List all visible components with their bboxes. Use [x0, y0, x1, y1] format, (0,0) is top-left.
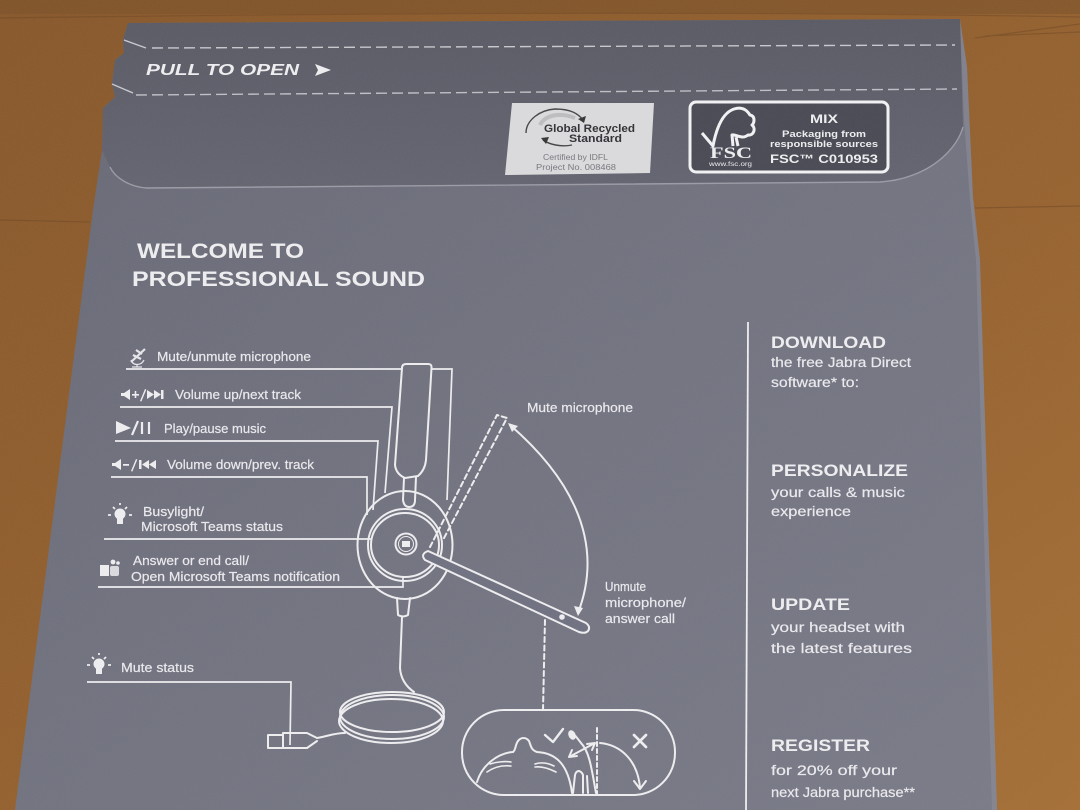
control label: volume up	[120, 387, 392, 493]
control label: play pause	[115, 421, 378, 510]
badge: FSC mix: MIX	[810, 112, 838, 126]
control label: busylight: Busylight/	[143, 504, 204, 519]
control label: answer or end call: Open Microsoft Teams notification	[131, 569, 340, 584]
top flap	[102, 19, 963, 188]
icon: Microsoft Teams	[100, 560, 120, 576]
pull to open tab	[146, 62, 331, 79]
badge: FSC mix: www.fsc.org	[708, 161, 752, 168]
column: personalize: experience	[771, 504, 851, 519]
perforation tear lines	[112, 40, 957, 95]
control label: volume down: Volume down/prev. track	[167, 457, 315, 472]
label: unmute microphone position	[605, 579, 686, 626]
badge: Global Recycled Standard: Certified by IDFL	[543, 152, 608, 162]
badge: FSC mix: responsible sources	[770, 139, 878, 150]
dashed raised microphone boom	[430, 415, 507, 547]
control label: volume down	[111, 457, 367, 515]
ear cup	[358, 491, 452, 599]
column: register: REGISTER	[771, 737, 870, 755]
pull to open tab: PULL TO OPEN	[146, 62, 300, 79]
cross mark	[634, 735, 646, 747]
control label: volume up: Volume up/next track	[175, 387, 302, 402]
column: update	[771, 596, 912, 656]
column: download	[771, 334, 911, 390]
icon: volume up and next track	[121, 389, 164, 402]
USB plug	[268, 733, 345, 748]
control label: mute microphone: Mute/unmute microphone	[157, 349, 311, 364]
column: personalize: your calls & music	[771, 485, 905, 500]
headband	[395, 364, 432, 478]
dashed connector to fit detail	[543, 620, 545, 710]
icon: light bulb	[108, 503, 132, 524]
head from above	[477, 738, 572, 793]
microphone	[571, 733, 596, 793]
badge: FSC mix: Packaging from	[782, 129, 866, 140]
column: update: your headset with	[771, 620, 905, 635]
cable coil	[339, 692, 444, 743]
label: mute microphone position: Mute microphone	[527, 400, 633, 415]
column: personalize	[771, 462, 908, 519]
control label: mute microphone	[126, 349, 452, 500]
icon: volume down and previous track	[112, 459, 156, 472]
column: register: for 20% off your	[771, 763, 898, 778]
column: update: UPDATE	[771, 596, 850, 614]
title: WELCOME TO	[137, 240, 304, 263]
column: download: software* to:	[771, 375, 859, 390]
headband neck	[403, 477, 416, 507]
icon: muted microphone	[131, 349, 145, 367]
column: download: the free Jabra Direct	[771, 355, 911, 370]
badge: FSC mix: FSC	[710, 145, 752, 162]
double arrow	[569, 743, 595, 757]
arrow: incorrect direction	[600, 743, 646, 789]
headset diagram	[268, 364, 589, 748]
badge: FSC mix	[690, 102, 888, 172]
label: unmute microphone position: Unmute	[605, 579, 646, 594]
control label: answer or end call: Answer or end call/	[133, 553, 249, 568]
lowered microphone boom	[423, 551, 589, 633]
control label: answer or end call	[98, 553, 403, 587]
column: personalize: PERSONALIZE	[771, 462, 908, 480]
icon: FSC check and tree	[702, 108, 754, 146]
badge: Global Recycled Standard: Project No. 008468	[536, 162, 616, 172]
control label: mute status: Mute status	[121, 660, 195, 675]
cable and strain relief	[397, 598, 414, 692]
badge: Global Recycled Standard: Global Recycled	[544, 123, 635, 135]
label: unmute microphone position: microphone/	[605, 595, 686, 610]
column: register: next Jabra purchase**	[771, 785, 916, 800]
detail: microphone placement	[462, 710, 675, 795]
title: PROFESSIONAL SOUND	[132, 268, 425, 291]
column: register	[771, 737, 916, 800]
control label: busylight: Microsoft Teams status	[141, 519, 284, 534]
check mark	[545, 729, 563, 742]
control label: mute status	[87, 653, 291, 745]
label: unmute microphone position: answer call	[605, 611, 675, 626]
control label: busylight	[104, 503, 372, 539]
column: download: DOWNLOAD	[771, 334, 886, 352]
arrow: mute and unmute sweep	[508, 423, 588, 616]
badge: Global Recycled Standard: Standard	[569, 133, 622, 145]
icon: light bulb	[87, 653, 111, 674]
title	[132, 240, 425, 291]
dashed limit line	[596, 728, 598, 794]
icon: play and pause	[116, 421, 149, 435]
column: update: the latest features	[771, 641, 912, 656]
control label: play pause: Play/pause music	[164, 421, 266, 436]
divider between diagram and column	[746, 322, 748, 810]
badge: Global Recycled Standard	[505, 103, 654, 175]
badge: FSC mix: FSC™ C010953	[770, 152, 878, 166]
